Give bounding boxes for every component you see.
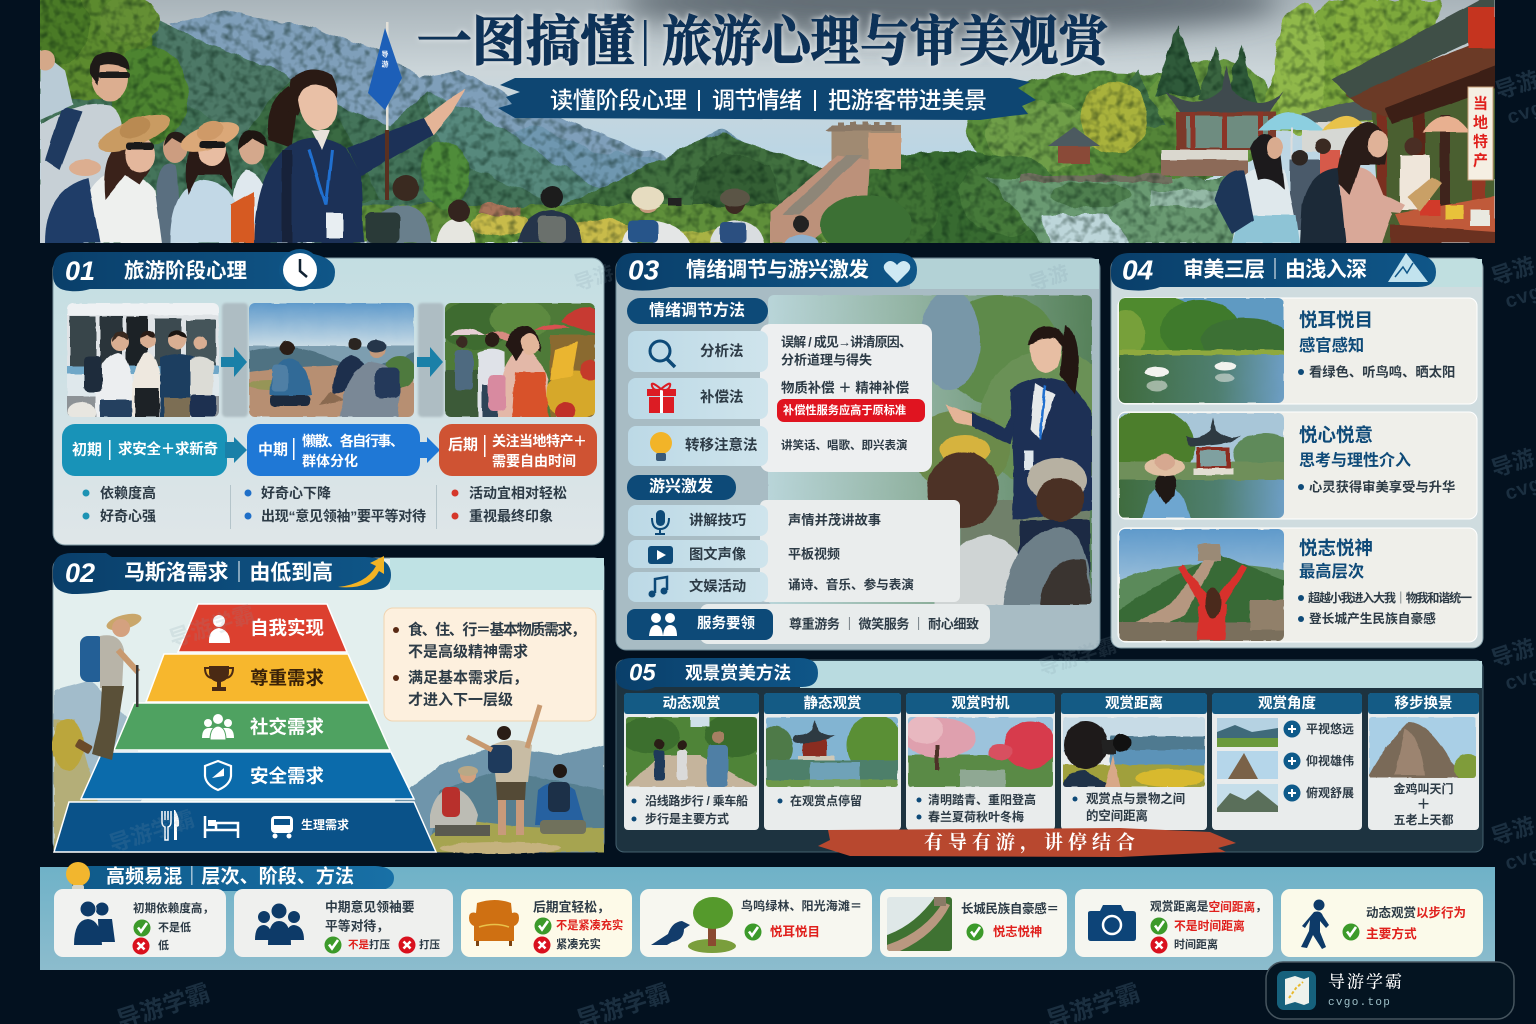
subtitle brush banner: 读懂阶段心理 <box>550 87 687 113</box>
method: distraction <box>628 426 908 466</box>
watermarks on panels <box>106 260 1119 857</box>
section heading 05: 05 <box>629 660 656 686</box>
bullets: late: 活动宜相对轻松 <box>469 485 567 501</box>
service essentials: 尊重游务 ｜ 微笑服务 ｜ 耐心细致 <box>789 616 979 632</box>
method: distraction: 转移注意法 <box>685 436 758 454</box>
callout: needs notes: 食、住、行＝基本物质需求， <box>408 620 586 638</box>
card: late stage: 不是紧凑充实 <box>556 918 623 932</box>
column: moving viewpoint <box>1368 693 1482 830</box>
stage pill: early <box>62 424 247 476</box>
guide <box>254 70 466 243</box>
pyramid level: esteem: 尊重需求 <box>250 668 325 688</box>
photo: guide speaking to group <box>768 290 1120 605</box>
card: dynamic walking example: 主要方式 <box>1366 926 1417 941</box>
great wall <box>770 122 912 255</box>
pavilions and temple <box>1048 0 1495 243</box>
card: late stage: 后期宜轻松， <box>533 900 610 914</box>
bullets: early: 好奇心强 <box>100 508 156 524</box>
section heading 03: 情绪调节与游兴激发 <box>686 258 870 282</box>
card: late stage <box>461 889 632 957</box>
column: angle: 俯观舒展 <box>1306 785 1354 800</box>
column: timing: 观赏时机 <box>952 694 1010 712</box>
bullets: early <box>82 485 156 524</box>
band heading <box>72 864 394 891</box>
stage pill: late <box>439 424 597 476</box>
stage pill: early: 求安全＋求新奇 <box>118 440 218 458</box>
band heading: 高频易混｜层次、阶段、方法 <box>106 864 354 888</box>
card: distance example: 不是时间距离 <box>1174 919 1245 933</box>
section heading 04: 04 <box>1122 254 1154 286</box>
card: middle stage: 中期意见领袖要 <box>325 900 415 914</box>
card: early stage <box>54 889 226 957</box>
stage pill: late: 后期 <box>448 436 478 454</box>
pyramid level: physiological: 生理需求 <box>301 817 349 832</box>
technique: media <box>628 540 840 568</box>
card: mind: 心灵获得审美享受与升华 <box>1309 478 1455 494</box>
card: middle stage: 打压 <box>419 938 440 951</box>
column: timing: 春兰夏荷秋叶冬梅 <box>928 809 1024 824</box>
section heading 01: 01 <box>65 256 95 286</box>
tourists group left <box>35 50 187 243</box>
service essentials: 服务要领 <box>697 614 755 632</box>
card: sensory example: 悦耳悦目 <box>770 924 820 939</box>
methods detail background <box>760 324 932 472</box>
card: middle stage: 不是打压 <box>348 938 390 951</box>
card: distance example <box>1075 889 1273 957</box>
stage pill: late: 关注当地特产＋ <box>492 433 587 449</box>
card: national pride example: 长城民族自豪感＝ <box>961 901 1059 916</box>
red brush banner <box>818 828 1236 857</box>
arrow between photos 1 and 2 <box>221 303 248 417</box>
icon: clock <box>279 249 321 291</box>
method: compensation <box>628 378 925 422</box>
stage pill: early: 初期 <box>72 440 102 458</box>
pyramid <box>54 604 436 852</box>
hero landscape <box>40 0 1442 243</box>
card: mind: 悦心悦意 <box>1299 424 1373 446</box>
card: spirit: 超越小我进入大我｜物我和谐统一 <box>1308 590 1472 605</box>
section heading 02 <box>53 553 391 594</box>
column: timing: 清明踏青、重阳登高 <box>928 792 1036 807</box>
method: analysis: 分析法 <box>700 342 744 360</box>
back-view tourists <box>366 175 818 243</box>
title: 旅游心理与审美观赏 <box>662 12 1114 72</box>
panel 02: Maslow <box>52 553 604 854</box>
bullets: middle: 好奇心下降 <box>261 485 331 501</box>
panel 01: travel stages <box>53 249 605 545</box>
section heading 01: 旅游阶段心理 <box>124 258 247 282</box>
subtitle brush banner <box>498 78 1036 120</box>
card: national pride example <box>880 889 1067 957</box>
card: mind: 思考与理性介入 <box>1299 450 1411 470</box>
technique: media: 图文声像 <box>689 545 747 563</box>
stage pill: middle: 中期 <box>258 442 288 458</box>
method: compensation: 补偿法 <box>700 388 744 406</box>
service essentials <box>627 604 990 644</box>
celebrating tourists <box>430 705 586 836</box>
pyramid level: self-actualization: 自我实现 <box>250 618 324 638</box>
interest detail background <box>760 500 960 602</box>
icon: lightbulb <box>66 862 90 892</box>
callout: needs notes: 才进入下一层级 <box>408 690 513 708</box>
hero banner illustration <box>40 0 1495 243</box>
brand logo badge <box>1266 962 1514 1019</box>
pyramid level: safety: 安全需求 <box>250 766 325 786</box>
section heading 04: 审美三层｜由浅入深 <box>1183 258 1367 282</box>
card: senses <box>1100 293 1477 404</box>
red brush banner: 有导有游，讲停结合 <box>924 832 1135 854</box>
column: timing <box>904 693 1056 830</box>
watermarks on panels: 导游 <box>571 260 616 295</box>
column: angle: 平视悠远 <box>1306 721 1354 736</box>
subtitle brush banner: 调节情绪 <box>712 87 802 113</box>
pyramid level: self-actualization <box>209 615 324 643</box>
stage pill: middle: 群体分化 <box>302 453 358 469</box>
technique: entertainment <box>628 572 914 602</box>
local specialty sign <box>1468 87 1493 180</box>
column: angle <box>1212 693 1362 830</box>
watermarks on panels: 导游学霸 <box>1036 633 1119 680</box>
card: distance example: 时间距离 <box>1174 937 1218 951</box>
watermarks on panels: 导游 <box>1026 260 1071 295</box>
pyramid level: physiological <box>162 810 349 840</box>
card: middle stage: 平等对待， <box>325 918 389 934</box>
method: compensation: 补偿性服务应高于原标准 <box>783 403 906 417</box>
section heading 02: 02 <box>65 558 95 588</box>
technique: media: 平板视频 <box>788 546 840 562</box>
column: moving viewpoint: 五老上天都 <box>1393 812 1454 827</box>
method: analysis: 分析道理与得失 <box>781 352 872 368</box>
section heading 01 <box>53 252 335 291</box>
column: static viewing <box>757 693 903 830</box>
tourists group middle <box>170 116 268 243</box>
watermarks on panels: 导游学霸 <box>166 601 258 652</box>
pyramid level: safety <box>205 761 325 790</box>
column: moving viewpoint: 移步换景 <box>1394 695 1452 712</box>
subheading: methods <box>627 298 768 324</box>
hiker <box>75 611 143 760</box>
column: dynamic viewing <box>620 693 765 830</box>
brand logo badge: cvgo.top <box>1328 997 1391 1009</box>
card: early stage: 低 <box>158 938 169 952</box>
section heading 04 <box>1111 253 1436 291</box>
icon: rising arrow <box>338 556 384 587</box>
bullets: late <box>452 485 567 524</box>
card: spirit <box>1118 528 1477 645</box>
subheading: interest <box>627 475 736 500</box>
method: distraction: 讲笑话、唱歌、即兴表演 <box>781 438 908 452</box>
bullets: early: 依赖度高 <box>100 485 156 501</box>
subtitle brush banner: 把游客带进美景 <box>828 87 987 113</box>
stage pill: late: 需要自由时间 <box>492 453 576 469</box>
panel 03: emotion regulation <box>616 253 1120 650</box>
card: spirit: 悦志悦神 <box>1299 538 1373 558</box>
pyramid level: esteem <box>205 666 325 691</box>
flag <box>368 22 402 200</box>
section heading 02: 马斯洛需求｜由低到高 <box>124 560 333 584</box>
column: dynamic viewing: 沿线路步行 / 乘车船 <box>645 793 748 808</box>
column: angle: 仰视雄伟 <box>1306 753 1354 768</box>
brand logo badge: 导游学霸 <box>1328 972 1404 992</box>
bullets: middle: 出现“意见领袖”要平等对待 <box>261 508 426 524</box>
card: early stage: 不是低 <box>158 920 191 934</box>
column: angle: 观赏角度 <box>1258 694 1316 712</box>
photo: lake with swans <box>1119 298 1284 403</box>
column: static viewing: 在观赏点停留 <box>790 793 862 808</box>
icon: mountain <box>1388 253 1428 282</box>
photo: resting on the mountain <box>248 303 416 417</box>
technique: narration: 声情并茂讲故事 <box>788 512 881 528</box>
watermarks on panels: 导游学霸 <box>106 806 198 857</box>
method: analysis: 误解 / 成见→讲清原因、 <box>781 334 912 350</box>
card: sensory example: 鸟鸣绿林、阳光海滩＝ <box>741 898 862 913</box>
title: 一图搞懂 <box>417 12 635 72</box>
card: national pride example: 悦志悦神 <box>993 924 1042 939</box>
icon: map app <box>1277 971 1316 1010</box>
card: senses: 悦耳悦目 <box>1299 310 1373 330</box>
section heading 03: 03 <box>628 254 660 286</box>
tourist woman with navy backpack <box>1214 133 1300 243</box>
card: dynamic walking example: 动态观赏以步行为 <box>1366 905 1466 920</box>
method: analysis <box>628 331 912 372</box>
icon: heart <box>884 261 910 283</box>
card: sensory example <box>640 889 872 957</box>
section heading 03 <box>616 253 917 291</box>
arrow between photos 2 and 3 <box>417 303 444 417</box>
local specialty sign: 当 <box>1473 94 1488 112</box>
column: distance: 观赏距离 <box>1105 694 1163 712</box>
panel 04: three aesthetic levels <box>1100 253 1483 648</box>
technique: narration: 讲解技巧 <box>689 511 746 529</box>
card: mind <box>1105 409 1477 519</box>
panel 05: viewing methods <box>616 658 1483 852</box>
card: middle stage <box>234 889 453 957</box>
technique: entertainment: 文娱活动 <box>689 577 746 595</box>
column: moving viewpoint: 金鸡叫天门 <box>1393 781 1454 796</box>
stage pill: middle <box>247 424 440 476</box>
photo: arrival at bus <box>67 303 219 422</box>
column: dynamic viewing: 动态观赏 <box>662 694 720 712</box>
technique: narration <box>628 505 881 536</box>
subheading: methods: 情绪调节方法 <box>649 300 745 320</box>
method: compensation: 物质补偿 ＋ 精神补偿 <box>781 380 909 396</box>
section heading 05: 观景赏美方法 <box>685 662 791 683</box>
column: static viewing: 静态观赏 <box>804 694 862 712</box>
pyramid level: social <box>202 714 325 740</box>
column: distance <box>1061 693 1207 830</box>
card: distance example: 观赏距离是空间距离， <box>1150 900 1267 914</box>
card: dynamic walking example <box>1281 889 1483 957</box>
column: dynamic viewing: 步行是主要方式 <box>645 811 729 826</box>
local specialty sign: 地 <box>1473 114 1488 132</box>
callout: needs notes: 满足基本需求后， <box>408 668 528 686</box>
card: senses: 感官感知 <box>1299 336 1364 355</box>
stage pill: middle: 懒散、各自行事、 <box>302 433 404 449</box>
local specialty sign: 特 <box>1473 132 1488 150</box>
callout: needs notes: 不是高级精神需求 <box>408 642 528 660</box>
bottom band: common confusions <box>40 862 1495 970</box>
title <box>417 12 1114 72</box>
tourist woman with dark backpack <box>1300 122 1405 243</box>
card: late stage: 紧凑充实 <box>556 937 601 951</box>
subheading: interest: 游兴激发 <box>649 476 713 496</box>
card: early stage: 初期依赖度高， <box>133 901 214 915</box>
flag: 导 <box>382 50 388 58</box>
card: spirit: 登长城产生民族自豪感 <box>1309 611 1436 626</box>
photo: woman on great wall <box>1119 529 1284 645</box>
landscape background <box>52 680 604 854</box>
card: senses: 看绿色、听鸟鸣、晒太阳 <box>1309 364 1455 380</box>
card: spirit: 最高层次 <box>1299 562 1364 581</box>
column: moving viewpoint: ＋ <box>1416 796 1430 812</box>
pyramid level: social: 社交需求 <box>250 716 325 738</box>
photo: local market <box>445 303 595 417</box>
photo: pavilion and woman <box>1119 413 1284 518</box>
callout: needs notes <box>384 608 596 721</box>
section heading 05 <box>616 658 818 691</box>
column: distance: 观赏点与景物之间 <box>1086 791 1185 806</box>
local specialty sign: 产 <box>1473 152 1488 170</box>
column: distance: 的空间距离 <box>1086 808 1148 823</box>
bullets: middle <box>244 485 426 524</box>
flag: 游 <box>382 60 388 68</box>
technique: entertainment: 诵诗、音乐、参与表演 <box>788 577 914 592</box>
bullets: late: 重视最终印象 <box>469 508 553 524</box>
